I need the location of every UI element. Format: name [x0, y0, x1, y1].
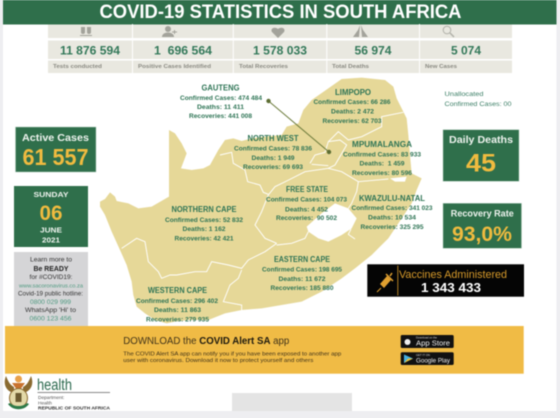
stat: total recoveries — [239, 44, 307, 70]
label: Northern Cape: NORTHERN CAPE — [172, 205, 237, 214]
label: KwaZulu-Natal: Recoveries: 325 295 — [360, 224, 424, 231]
panel: daily deaths: 45 — [466, 150, 496, 178]
badge: Google Play: Google Play — [416, 358, 451, 364]
stat: positive cases — [138, 44, 212, 70]
stat: new cases: 5 074 — [451, 44, 481, 58]
label: Gauteng: Recoveries: 441 008 — [189, 113, 252, 120]
map of South Africa — [100, 78, 422, 323]
logo: health department — [37, 377, 111, 412]
banner: app download: DOWNLOAD the COVID Alert SA app — [123, 336, 290, 347]
badge: App Store: Download on the — [416, 336, 437, 340]
panel: date: SUNDAY — [34, 190, 68, 199]
logo: coat of arms — [5, 376, 32, 409]
label: Limpopo: Confirmed Cases: 66 286 — [314, 99, 391, 106]
label: Gauteng: Deaths: 11 411 — [197, 104, 244, 111]
panel: recovery rate: Recovery Rate — [451, 208, 514, 218]
logo: health department: Department: — [38, 395, 64, 401]
label: Limpopo: LIMPOPO — [335, 88, 371, 97]
label: Gauteng: GAUTENG — [202, 84, 240, 92]
panel: active cases — [16, 127, 96, 172]
icon: praying hands — [353, 25, 368, 37]
logo: health department: REPUBLIC OF SOUTH AFRICA — [38, 406, 111, 412]
label: North West: Deaths: 1 949 — [252, 155, 295, 162]
stat: total deaths: 56 974 — [354, 44, 392, 58]
label: North West: NORTH WEST — [248, 134, 299, 143]
panel: active cases: Active Cases — [22, 133, 89, 144]
panel: recovery rate — [443, 203, 522, 248]
panel: date: 2021 — [42, 238, 60, 244]
stat: positive cases: 1 696 564 — [154, 44, 212, 58]
label: Western Cape: Confirmed Cases: 296 402 — [136, 298, 218, 305]
label: Northern Cape: Recoveries: 42 421 — [174, 236, 234, 242]
panel: active cases: 61 557 — [22, 144, 88, 170]
title banner — [3, 0, 556, 24]
panel: vaccines administered — [367, 264, 524, 297]
panel: learn more: 0600 123 456 — [30, 316, 72, 322]
icon: syringe — [377, 273, 393, 292]
label: Free State: Recoveries: 90 502 — [276, 215, 337, 222]
title banner: COVID-19 STATISTICS IN SOUTH AFRICA — [100, 2, 462, 23]
label: Northern Cape: Confirmed Cases: 52 832 — [165, 217, 243, 224]
label: North West — [234, 134, 312, 171]
stat: tests conducted: 11 876 594 — [60, 44, 120, 58]
label: Free State: FREE STATE — [286, 185, 329, 194]
label: KwaZulu-Natal: Deaths: 10 534 — [368, 214, 416, 222]
panel: daily deaths: Daily Deaths — [449, 135, 513, 146]
banner: app download — [5, 326, 524, 374]
statistics table — [48, 24, 512, 73]
label: Western Cape: Deaths: 11 863 — [154, 307, 201, 314]
label: KwaZulu-Natal: KWAZULU-NATAL — [359, 194, 425, 203]
label: Eastern Cape: Confirmed Cases: 198 695 — [262, 266, 342, 274]
panel: learn more: for #COVID19: — [30, 275, 73, 281]
panel: learn more: Learn more to — [30, 258, 73, 264]
banner: app download: The COVID Alert SA app can notify you if you have been exposed to another app — [123, 352, 341, 358]
panel: learn more: WhatsApp 'Hi' to — [25, 308, 77, 314]
stat: total recoveries: 1 578 033 — [253, 44, 307, 58]
label: Eastern Cape: Deaths: 11 672 — [278, 276, 326, 283]
icon: person plus — [162, 26, 177, 37]
stat: total deaths — [332, 44, 392, 70]
label: Eastern Cape: EASTERN CAPE — [274, 255, 331, 264]
label: Mpumalanga: Confirmed Cases: 83 933 — [343, 152, 421, 158]
logo: health department: Health — [38, 400, 52, 406]
stat: new cases: New Cases — [425, 64, 457, 70]
panel: date — [14, 186, 88, 247]
unallocated note: Confirmed Cases: 00 — [444, 101, 512, 108]
badge: Google Play: GET IT ON — [416, 353, 430, 357]
stat: total deaths: Total Deaths — [332, 64, 369, 70]
label: North West: Recoveries: 69 693 — [243, 164, 303, 171]
panel: date: 06 — [40, 202, 62, 225]
label: KwaZulu-Natal — [352, 194, 433, 231]
panel: learn more: www.sacoronavirus.co.za — [19, 284, 83, 290]
stat: new cases — [425, 44, 481, 70]
label: KwaZulu-Natal: Confirmed Cases: 341 023 — [352, 205, 433, 212]
label: North West: Confirmed Cases: 78 836 — [234, 146, 312, 152]
panel: learn more — [14, 252, 88, 327]
label: Limpopo — [314, 88, 391, 125]
icon: heart — [271, 28, 285, 38]
icon: test tubes — [80, 27, 92, 36]
label: Northern Cape: Deaths: 1 162 — [182, 226, 226, 233]
logo: health department: health — [37, 377, 72, 394]
badge: Google Play — [401, 352, 454, 365]
label: Eastern Cape: Recoveries: 185 880 — [270, 285, 334, 292]
banner: app download: user with coronavirus. Download it now to protect yourself and others — [123, 358, 314, 364]
label: Limpopo: Deaths: 2 472 — [331, 108, 374, 116]
Gauteng leader line — [266, 99, 331, 154]
label: Western Cape: Recoveries: 279 935 — [146, 316, 209, 324]
label: Northern Cape — [165, 205, 243, 242]
label: Mpumalanga: MPUMALANGA — [352, 140, 412, 149]
label: Free State: Confirmed Cases: 104 073 — [266, 196, 347, 204]
panel: vaccines administered: 1 343 433 — [421, 280, 481, 295]
stat: tests conducted: Tests conducted — [53, 64, 102, 70]
badge: App Store — [401, 335, 454, 348]
panel: daily deaths — [443, 130, 519, 181]
label: Western Cape: WESTERN CAPE — [148, 286, 208, 295]
label: Free State — [266, 185, 347, 222]
stat: total recoveries: Total Recoveries — [239, 64, 288, 70]
panel: date: JUNE — [40, 228, 62, 234]
label: Free State: Deaths: 4 452 — [285, 206, 328, 214]
unallocated note — [444, 91, 512, 108]
stat: tests conducted — [53, 44, 120, 70]
stat: positive cases: Positive Cases Identified — [138, 64, 211, 70]
label: Eastern Cape — [262, 255, 342, 292]
label: Western Cape — [136, 286, 218, 324]
label: Mpumalanga: Recoveries: 80 596 — [352, 170, 412, 177]
panel: learn more: 0800 029 999 — [30, 300, 72, 306]
label: Gauteng — [180, 84, 262, 120]
label: Mpumalanga — [343, 140, 421, 177]
panel: learn more: Covid-19 public hotline: — [18, 292, 83, 298]
label: Limpopo: Recoveries: 62 703 — [322, 118, 382, 125]
panel: vaccines administered: Vaccines Administered — [399, 269, 507, 281]
label: Mpumalanga: Deaths: 1 459 — [360, 160, 405, 168]
badge: App Store: App Store — [416, 340, 450, 348]
label: Gauteng: Confirmed Cases: 474 484 — [180, 95, 262, 102]
grey footer block — [232, 393, 352, 411]
panel: recovery rate: 93,0% — [452, 223, 512, 246]
icon: magnifier — [443, 26, 454, 37]
unallocated note: Unallocated — [444, 91, 484, 98]
panel: learn more: Be READY — [34, 266, 69, 273]
